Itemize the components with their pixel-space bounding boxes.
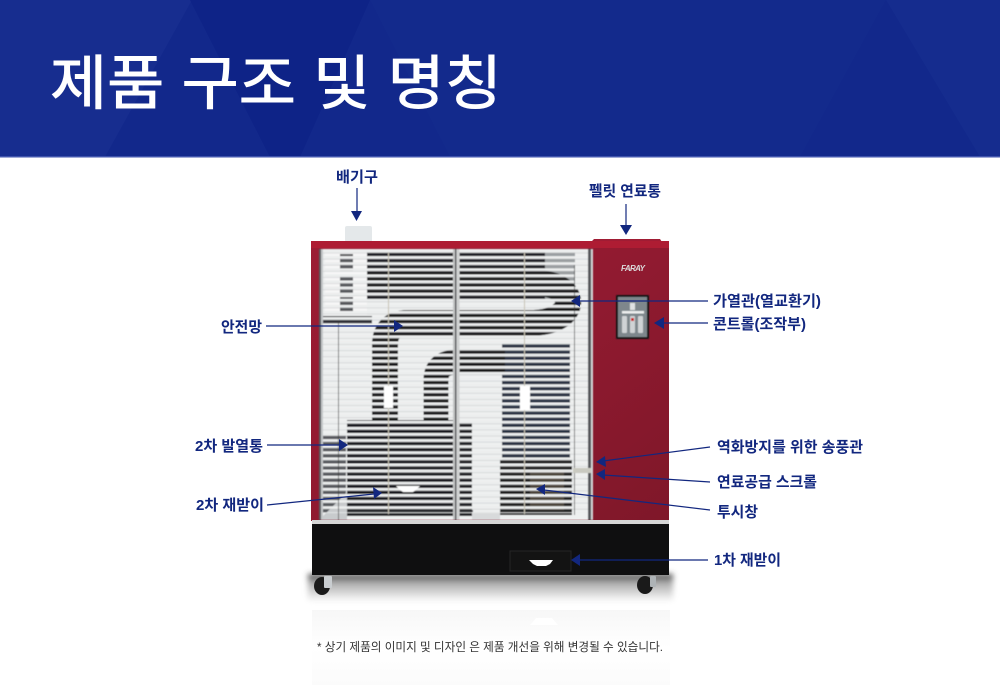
title: 제품 구조 및 명칭 bbox=[50, 51, 502, 117]
callout: 1차 재받이 bbox=[571, 552, 781, 569]
red cabinet bbox=[311, 241, 669, 521]
callout: 2차 재받이: 2차 재받이 bbox=[196, 497, 264, 514]
window posts and wires bbox=[319, 249, 593, 520]
brand mark: FARAY bbox=[621, 264, 646, 273]
callout: 역화방지를 위한 송풍관: 역화방지를 위한 송풍관 bbox=[717, 439, 863, 456]
header banner bbox=[0, 0, 1000, 158]
exhaust pipe stub bbox=[345, 226, 372, 242]
callout: 2차 발열통 bbox=[195, 438, 348, 455]
callout: 배기구 bbox=[336, 169, 378, 221]
secondary ash tray handle bbox=[396, 486, 420, 492]
callout: 배기구: 배기구 bbox=[336, 169, 378, 186]
footnote: * 상기 제품의 이미지 및 디자인 은 제품 개선을 위해 변경될 수 있습니다. bbox=[317, 640, 663, 654]
louver slats bbox=[319, 250, 592, 513]
callout: 펠릿 연료통: 펠릿 연료통 bbox=[589, 183, 661, 200]
callout: 1차 재받이: 1차 재받이 bbox=[714, 552, 781, 569]
callout: 역화방지를 위한 송풍관 bbox=[596, 439, 863, 467]
callout: 투시창 bbox=[536, 484, 758, 521]
heating duct bbox=[368, 283, 568, 432]
control panel bbox=[616, 295, 649, 339]
callout: 가열관(열교환기): 가열관(열교환기) bbox=[713, 293, 821, 310]
heater unit bbox=[311, 226, 669, 595]
callout: 2차 발열통: 2차 발열통 bbox=[195, 438, 263, 455]
window interior and louvers bbox=[319, 249, 593, 520]
silver trim bbox=[312, 520, 669, 524]
callout: 연료공급 스크롤 bbox=[596, 469, 817, 491]
callout: 콘트롤(조작부) bbox=[654, 316, 806, 333]
black base bbox=[312, 524, 669, 575]
callout: 2차 재받이 bbox=[196, 487, 382, 514]
callout: 펠릿 연료통 bbox=[589, 183, 661, 235]
primary ash drawer bbox=[510, 551, 571, 571]
callout: 콘트롤(조작부): 콘트롤(조작부) bbox=[713, 316, 806, 333]
callout: 가열관(열교환기) bbox=[571, 293, 821, 310]
right caster bbox=[637, 576, 656, 594]
pellet tank lid bbox=[591, 239, 669, 248]
callout: 안전망 bbox=[221, 319, 403, 336]
second duct bbox=[436, 362, 505, 432]
callout: 안전망: 안전망 bbox=[221, 319, 262, 336]
white vent box bbox=[325, 252, 367, 315]
callout: 연료공급 스크롤: 연료공급 스크롤 bbox=[717, 474, 817, 491]
callout: 투시창: 투시창 bbox=[717, 504, 758, 521]
left caster bbox=[314, 576, 332, 595]
heat exchange box bbox=[502, 343, 570, 465]
product shadow and reflection bbox=[308, 574, 673, 685]
secondary heating box bbox=[347, 420, 455, 512]
